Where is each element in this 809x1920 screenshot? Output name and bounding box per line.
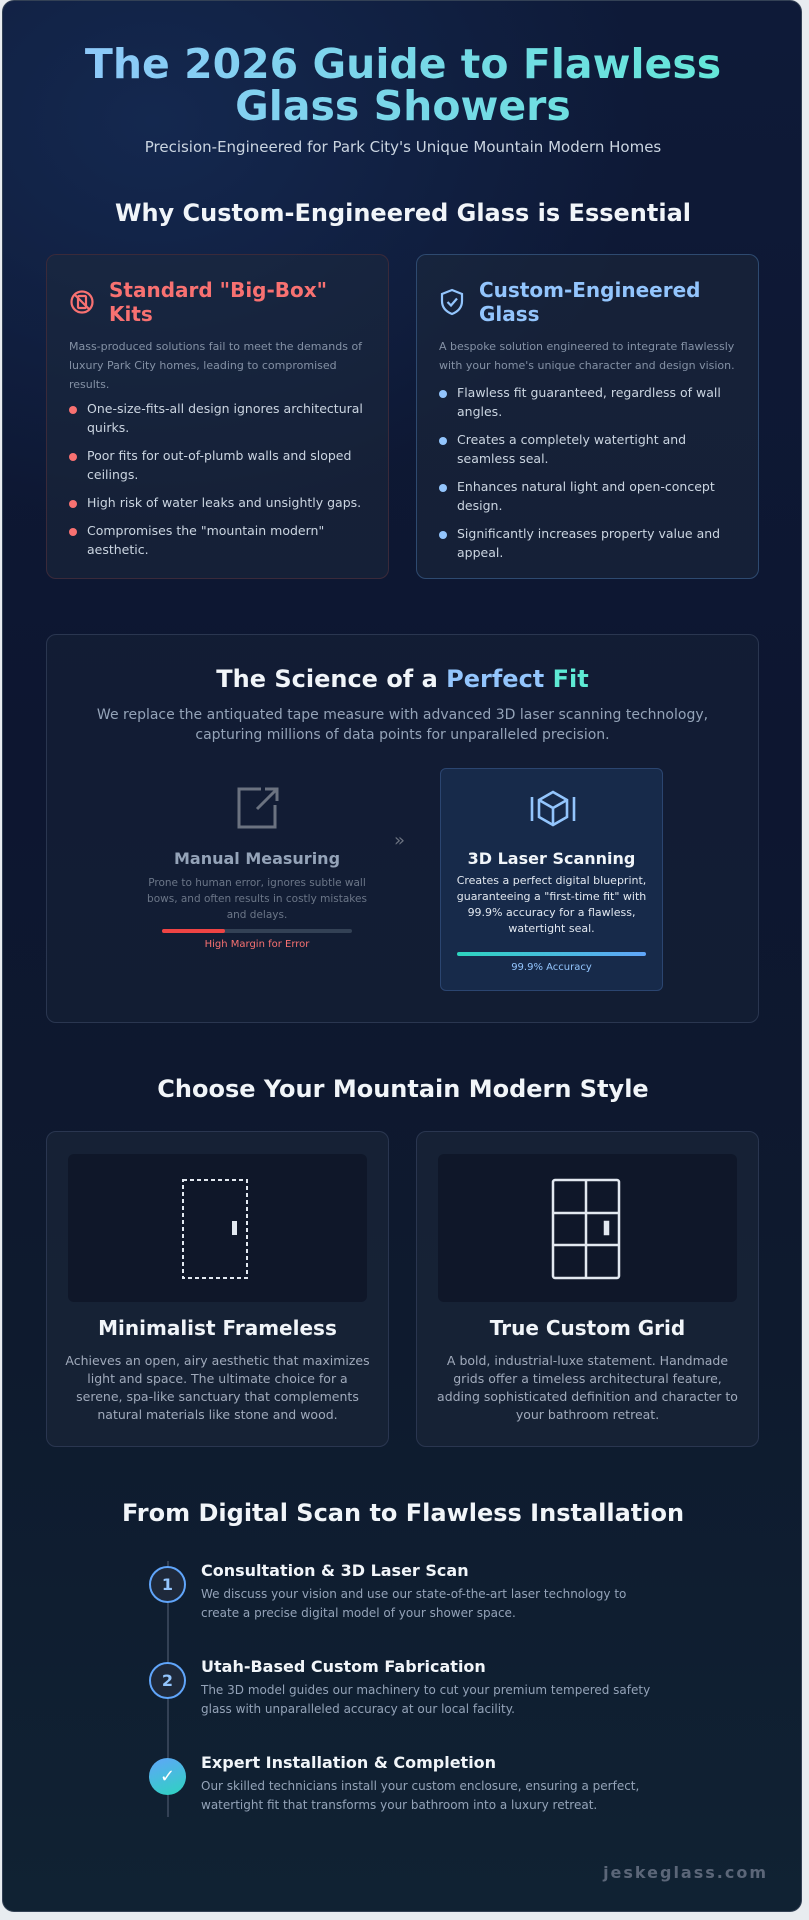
text: Mass-produced solutions fail to meet the demands of luxury Park City homes, leading to compromised results. [69, 340, 362, 391]
heading [479, 278, 700, 326]
list: Poor fits for out-of-plumb walls and sloped ceilings. [87, 448, 351, 482]
list: One-size-fits-all design ignores architectural quirks. [87, 401, 363, 435]
timeline [149, 1561, 650, 1817]
manual measuring [147, 788, 367, 950]
heading: process: From Digital Scan to Flawless Installation [122, 1499, 684, 1527]
heading: Kits [109, 302, 153, 326]
panel: frameless [46, 1131, 389, 1447]
text: We replace the antiquated tape measure with advanced 3D laser scanning technology, capturing millions of data points for unparalleled precision. [97, 707, 708, 743]
bar: error [162, 929, 352, 933]
arrow: » [394, 830, 405, 851]
list [69, 401, 363, 557]
list: Flawless fit guaranteed, regardless of wall angles. [457, 385, 721, 419]
list: Significantly increases property value and appeal. [457, 526, 720, 560]
illustration: frameless door [68, 1154, 367, 1302]
list: High risk of water leaks and unsightly gaps. [87, 495, 361, 510]
step 2: 2 [162, 1671, 173, 1690]
step 1: Consultation & 3D Laser Scan [201, 1561, 469, 1580]
step 2: Utah-Based Custom Fabrication [201, 1657, 486, 1676]
step 3: ✓ [160, 1766, 175, 1787]
heading: The Science of a Perfect Fit [216, 665, 589, 693]
heading: style: Choose Your Mountain Modern Style [157, 1075, 649, 1103]
manual measuring: High Margin for Error [205, 939, 309, 950]
panel: custom glass [416, 254, 759, 579]
step 2 [149, 1657, 650, 1716]
panel: science [46, 634, 759, 1023]
panel: grid [416, 1131, 759, 1447]
heading [109, 278, 327, 326]
laser scanning card: Creates a perfect digital blueprint, guaranteeing a "first-time fit" with 99.9% accuracy for a flawless, watertight seal. [457, 874, 646, 935]
step 3: Expert Installation & Completion [201, 1753, 496, 1772]
manual measuring: Manual Measuring [174, 849, 340, 868]
panel: grid: True Custom Grid [490, 1316, 685, 1340]
panel: frameless: Minimalist Frameless [98, 1316, 337, 1340]
panel: grid: A bold, industrial-luxe statement. Handmade grids offer a timeless architectural feature, adding sophisticated definition and character to your bathroom retreat. [437, 1353, 738, 1422]
text: A bespoke solution engineered to integrate flawlessly with your home's unique character and design vision. [439, 340, 735, 372]
heading: Glass [479, 302, 540, 326]
icon: shield [440, 288, 464, 316]
heading: why custom: Why Custom-Engineered Glass is Essential [115, 199, 691, 227]
list: Creates a completely watertight and seamless seal. [457, 432, 686, 466]
list: Compromises the "mountain modern" aesthetic. [87, 523, 324, 557]
step 1: We discuss your vision and use our state-of-the-art laser technology to create a precise digital model of your shower space. [201, 1587, 626, 1620]
step 2: The 3D model guides our machinery to cut your premium tempered safety glass with unparalleled accuracy at our local facility. [201, 1683, 650, 1716]
step 3: Our skilled technicians install your custom enclosure, ensuring a perfect, watertight fit that transforms your bathroom into a luxury retreat. [201, 1779, 639, 1812]
illustration: grid door [438, 1154, 737, 1302]
heading: Standard "Big-Box" [109, 278, 327, 302]
icon: prohibited [70, 290, 94, 314]
laser scanning card: 99.9% Accuracy [511, 962, 592, 973]
list: Enhances natural light and open-concept design. [457, 479, 715, 513]
icon: cube scan [530, 790, 576, 826]
title [3, 43, 803, 127]
bar: accuracy [457, 952, 646, 956]
list [439, 385, 721, 560]
step 1: 1 [162, 1575, 173, 1594]
step 1 [149, 1561, 626, 1620]
panel: standard kits [46, 254, 389, 579]
laser scanning card [440, 768, 663, 991]
manual measuring: Prone to human error, ignores subtle wall bows, and often results in costly mistakes and delays. [147, 877, 367, 921]
heading: Custom-Engineered [479, 278, 700, 302]
step 3 [149, 1753, 639, 1812]
icon: external link [238, 788, 278, 828]
footer: jeskeglass.com [603, 1863, 768, 1882]
subtitle: Precision-Engineered for Park City's Unique Mountain Modern Homes [145, 138, 661, 156]
laser scanning card: 3D Laser Scanning [468, 849, 635, 868]
panel: frameless: Achieves an open, airy aesthetic that maximizes light and space. The ultimate choice for a serene, spa-like sanctuary that complements natural materials like stone and wood. [65, 1353, 370, 1422]
